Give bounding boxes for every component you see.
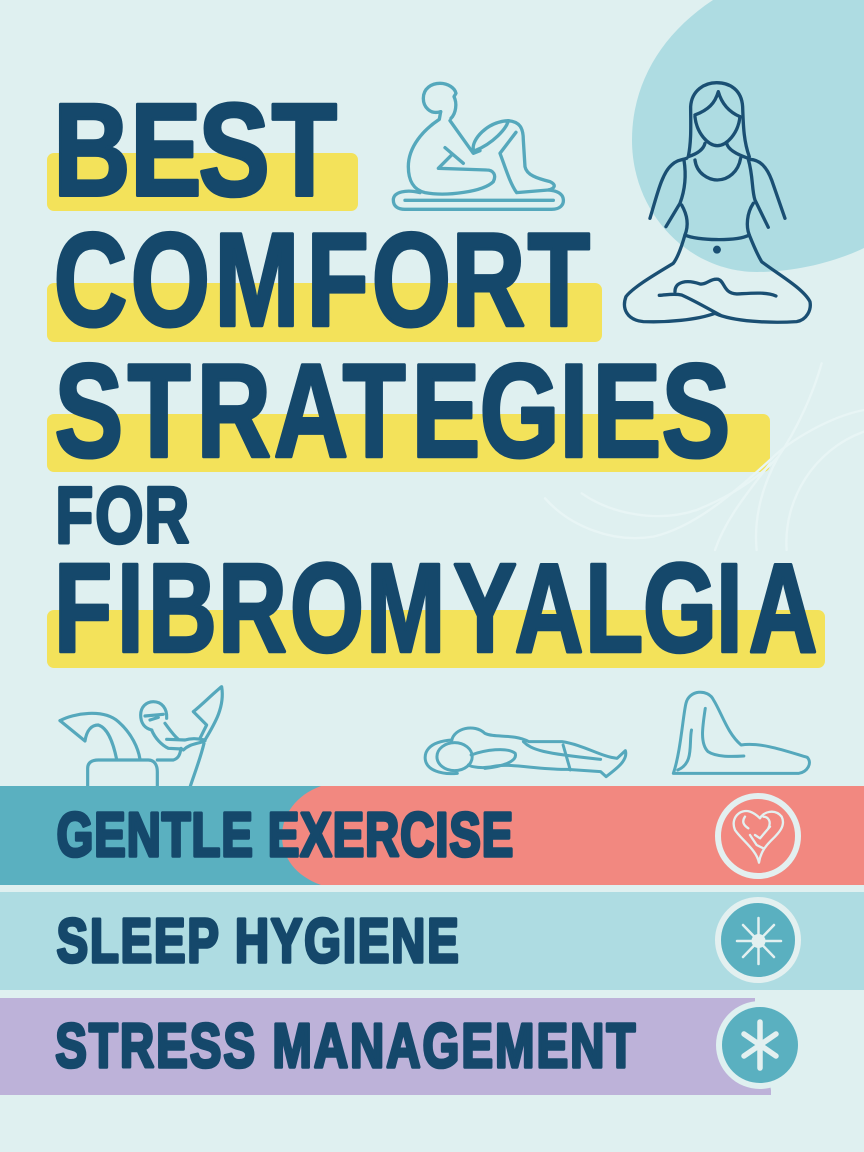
band: gentle exercise (0, 786, 864, 885)
icon: meditating woman (624, 83, 810, 322)
label: gentle exercise: GENTLE EXERCISE (57, 800, 513, 870)
icon: seated figure on chair (60, 687, 222, 787)
band purple background (0, 998, 771, 1095)
band: stress management (0, 998, 804, 1095)
decorative flowing lines (545, 363, 864, 550)
icon: seated stretch figure on mat (393, 83, 563, 209)
icon: asterisk (716, 1001, 804, 1089)
title line: best: BEST (53, 77, 337, 224)
title (47, 77, 825, 679)
icon: sun star (718, 900, 798, 980)
highlight: comfort (47, 283, 602, 342)
band blue background (0, 892, 864, 990)
highlight: strategies (47, 414, 770, 472)
band coral section (282, 786, 864, 885)
label: sleep hygiene: SLEEP HYGIENE (57, 906, 459, 976)
icon: lying figure (425, 728, 626, 777)
title line: strategies: STRATEGIES (55, 337, 730, 486)
band teal section (0, 786, 340, 885)
highlight: best (47, 153, 358, 211)
title line: for: FOR (55, 471, 189, 560)
decorative circle (632, 0, 864, 272)
icon: heart brain (718, 796, 798, 876)
band: sleep hygiene (0, 892, 864, 990)
icon: reclining stretch figure (673, 692, 809, 773)
title line: comfort: COMFORT (54, 207, 590, 355)
title line: fibromyalgia: FIBROMYALGIA (54, 537, 817, 679)
highlight: fibromyalgia (47, 610, 825, 668)
label: stress management: STRESS MANAGEMENT (55, 1011, 636, 1081)
